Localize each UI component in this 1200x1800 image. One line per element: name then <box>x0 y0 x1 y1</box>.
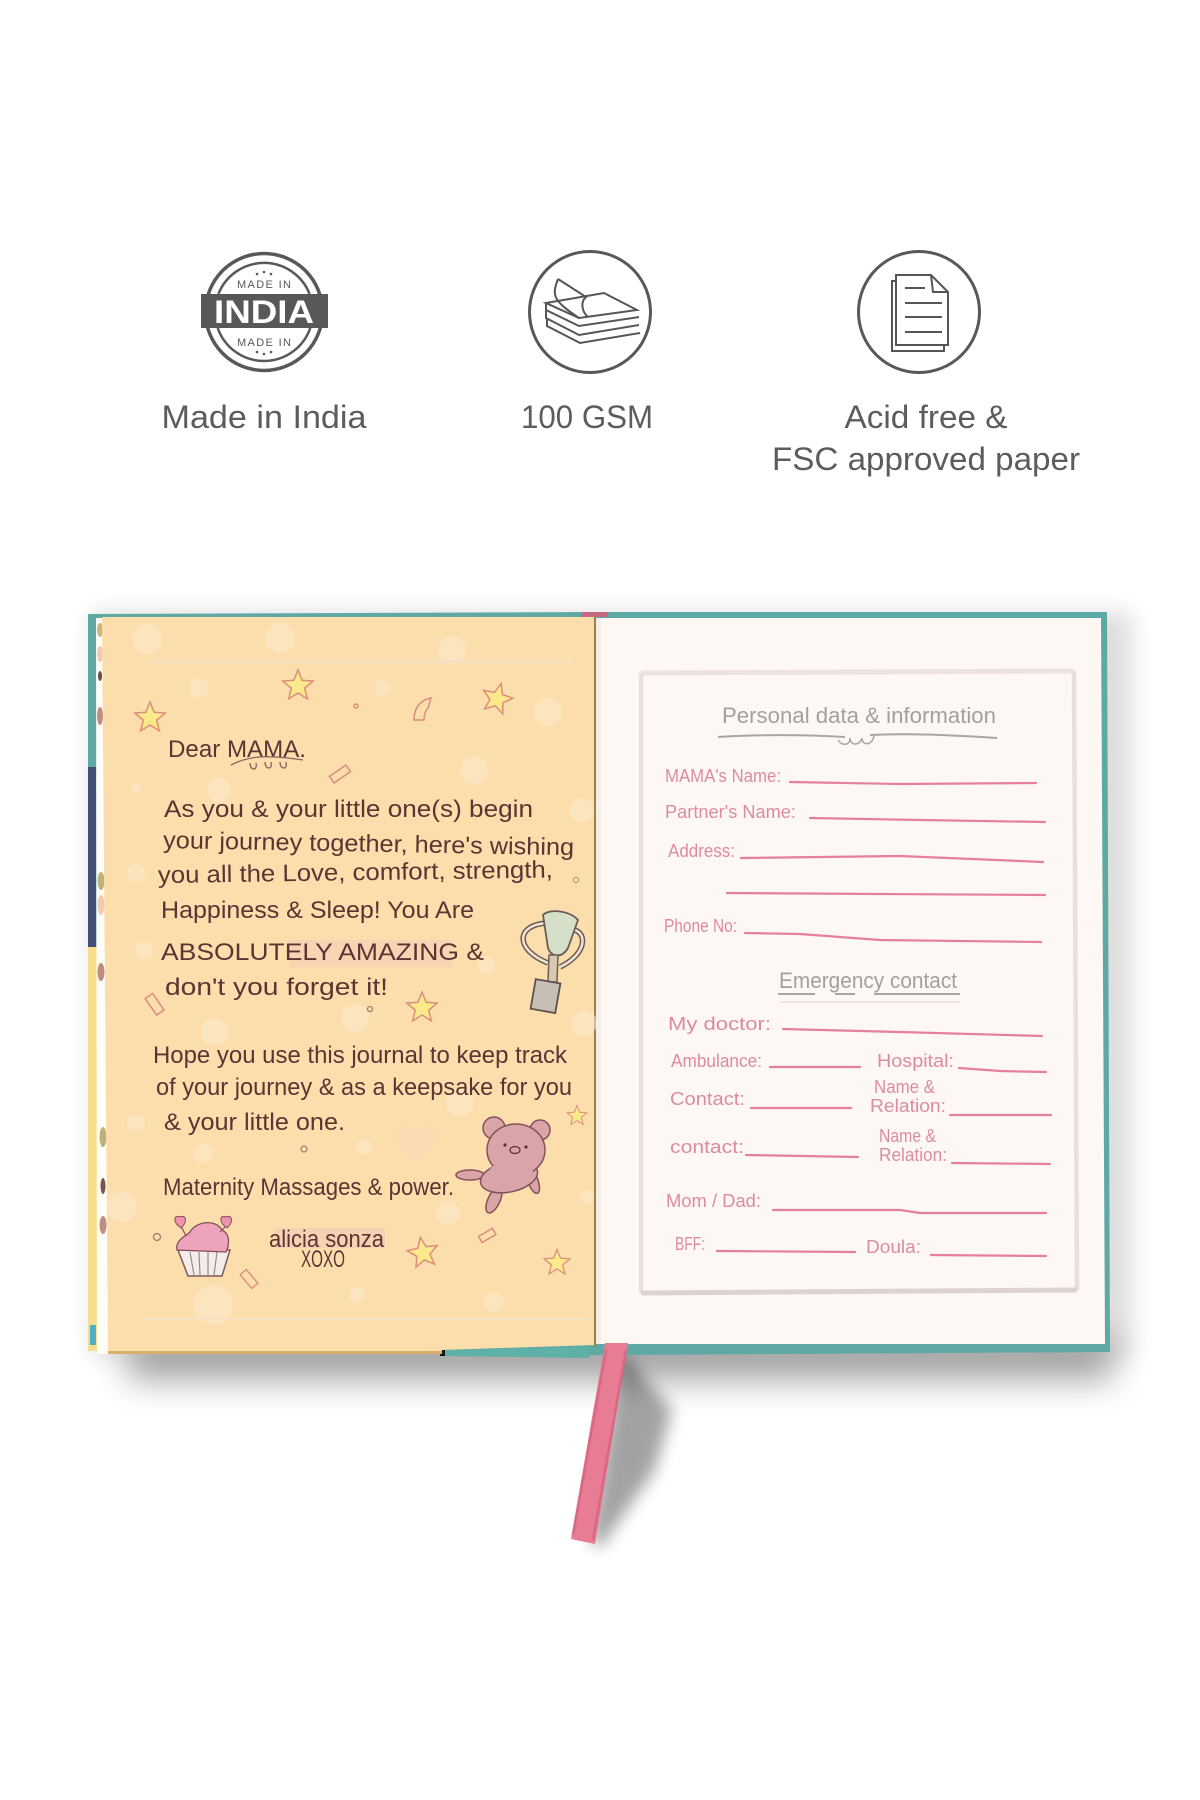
letter text: As you & your little one(s) begin <box>164 796 533 823</box>
open journal <box>88 612 1110 1544</box>
page edge with printed blobs <box>96 618 109 1354</box>
icon: bear <box>456 1117 550 1215</box>
heading: emergency contact: Emergency contact <box>779 968 957 993</box>
letter text: & your little one. <box>164 1109 345 1136</box>
letter text: you all the Love, comfort, strength, <box>158 856 553 889</box>
letter text: Maternity Massages & power. <box>163 1174 454 1201</box>
label: made in india: Made in India <box>162 399 367 435</box>
personal data fields: Phone No: <box>664 916 737 936</box>
emergency fields: Hospital: <box>877 1051 954 1071</box>
letter text: ABSOLUTELY AMAZING & <box>161 939 484 966</box>
letter text: don't you forget it! <box>165 974 388 1001</box>
icon: made in india badge: MADE IN <box>237 337 291 349</box>
emergency fields <box>666 1014 1051 1257</box>
letter text: XOXO <box>301 1246 345 1273</box>
emergency fields: Contact: <box>670 1089 745 1109</box>
letter text: of your journey & as a keepsake for you <box>156 1074 572 1101</box>
icon: document <box>858 252 980 372</box>
icon: cupcake <box>175 1216 231 1276</box>
emergency fields: Mom / Dad: <box>666 1191 761 1211</box>
label: acid free & fsc approved paper: Acid free & <box>844 399 1008 435</box>
left page: letter <box>96 617 597 1354</box>
personal data fields: Partner's Name: <box>665 802 796 822</box>
icon: made in india badge: INDIA <box>214 294 314 330</box>
feature: made in india <box>162 254 367 435</box>
label: acid free & fsc approved paper: FSC approved paper <box>772 441 1080 477</box>
heading: personal data <box>718 703 997 744</box>
personal data fields: Address: <box>668 841 735 861</box>
page background <box>102 617 595 1353</box>
feature: acid free paper <box>772 252 1080 477</box>
background dots <box>107 623 597 1325</box>
icon: paper stack <box>530 252 650 372</box>
emergency fields: Doula: <box>866 1237 921 1257</box>
emergency fields: My doctor: <box>668 1014 771 1034</box>
heading: personal data: Personal data & information <box>722 703 996 728</box>
icon: made in india badge <box>201 254 328 370</box>
icon: made in india badge: MADE IN <box>237 279 291 291</box>
emergency fields: BFF: <box>675 1234 705 1254</box>
book cover <box>88 612 1110 1358</box>
bookmark ribbon <box>571 1343 628 1544</box>
emergency fields: Relation: <box>870 1096 946 1116</box>
feature: 100 gsm <box>521 252 653 435</box>
personal data fields <box>664 766 1045 942</box>
letter text: Dear MAMA. <box>168 736 306 763</box>
emergency fields: contact: <box>670 1137 744 1157</box>
letter text: Hope you use this journal to keep track <box>153 1042 568 1069</box>
form frame <box>641 671 1077 1293</box>
stars <box>135 670 587 1288</box>
book shadow <box>92 612 1132 1548</box>
emergency fields: Relation: <box>879 1145 947 1165</box>
page background <box>597 618 1105 1344</box>
letter text: Happiness & Sleep! You Are <box>161 897 474 924</box>
letter text: your journey together, here's wishing <box>163 827 574 861</box>
right page: personal data form <box>596 618 1105 1344</box>
icon: trophy <box>523 911 583 1013</box>
letter text <box>153 736 574 1273</box>
personal data fields: MAMA's Name: <box>665 766 781 786</box>
emergency fields: Name & <box>879 1126 936 1146</box>
emergency fields: Ambulance: <box>671 1051 762 1071</box>
emergency fields: Name & <box>874 1077 935 1097</box>
label: 100 gsm: 100 GSM <box>521 399 653 435</box>
label: acid free & fsc approved paper <box>772 399 1080 477</box>
letter text: alicia sonza <box>269 1226 385 1253</box>
